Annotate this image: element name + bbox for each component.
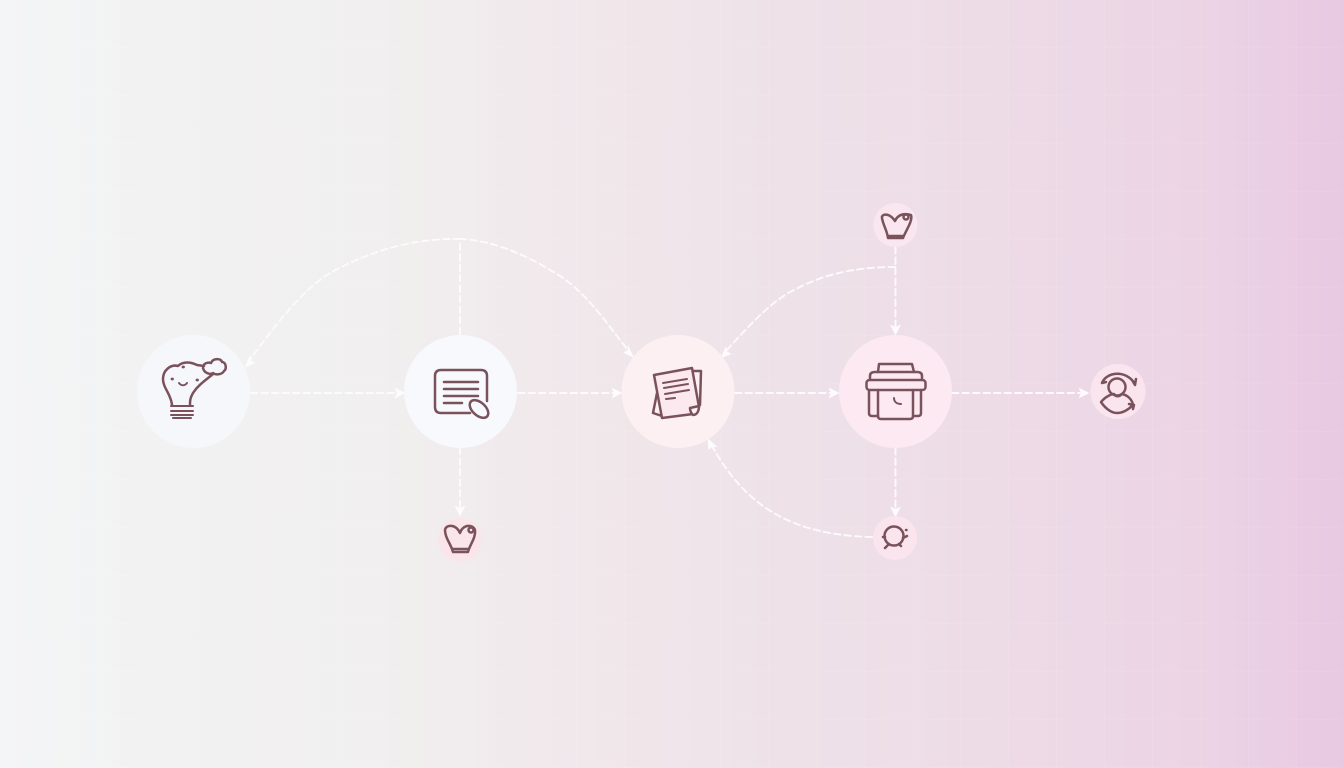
node: document [404, 335, 517, 448]
arrow: notes to box [735, 388, 840, 398]
arrow: curve from gear to notes [708, 438, 872, 537]
icon: heart cup lower [445, 526, 475, 552]
arrow: box to person [952, 388, 1090, 398]
arrow: document down to heart [454, 448, 466, 516]
icon: heart cup [882, 214, 911, 238]
arrow: arc forward to notes [460, 239, 634, 358]
node: box [839, 335, 952, 448]
icon: storage box [866, 364, 926, 419]
node: gear [873, 516, 917, 560]
node: lower heart [438, 518, 482, 562]
icon: person with cycle arrows [1101, 374, 1136, 413]
arrow: curve from top branch to notes [720, 267, 895, 358]
icon: light bulb with cloud [163, 359, 226, 418]
arrow: document up to arcs [459, 240, 461, 334]
arrow: arc back to idea [244, 239, 460, 368]
node: person [1090, 364, 1146, 419]
icon: document with seed [435, 370, 492, 421]
node: top heart [874, 203, 918, 247]
icon: ring with spokes [883, 526, 907, 548]
node: notes [622, 335, 734, 448]
icon: stacked notes [653, 368, 701, 418]
arrow: top heart down to box [890, 247, 901, 336]
node: idea [137, 335, 250, 448]
arrow: idea to document [251, 388, 406, 398]
arrow: box down to gear [890, 448, 901, 518]
arrow: document to notes [518, 388, 622, 398]
